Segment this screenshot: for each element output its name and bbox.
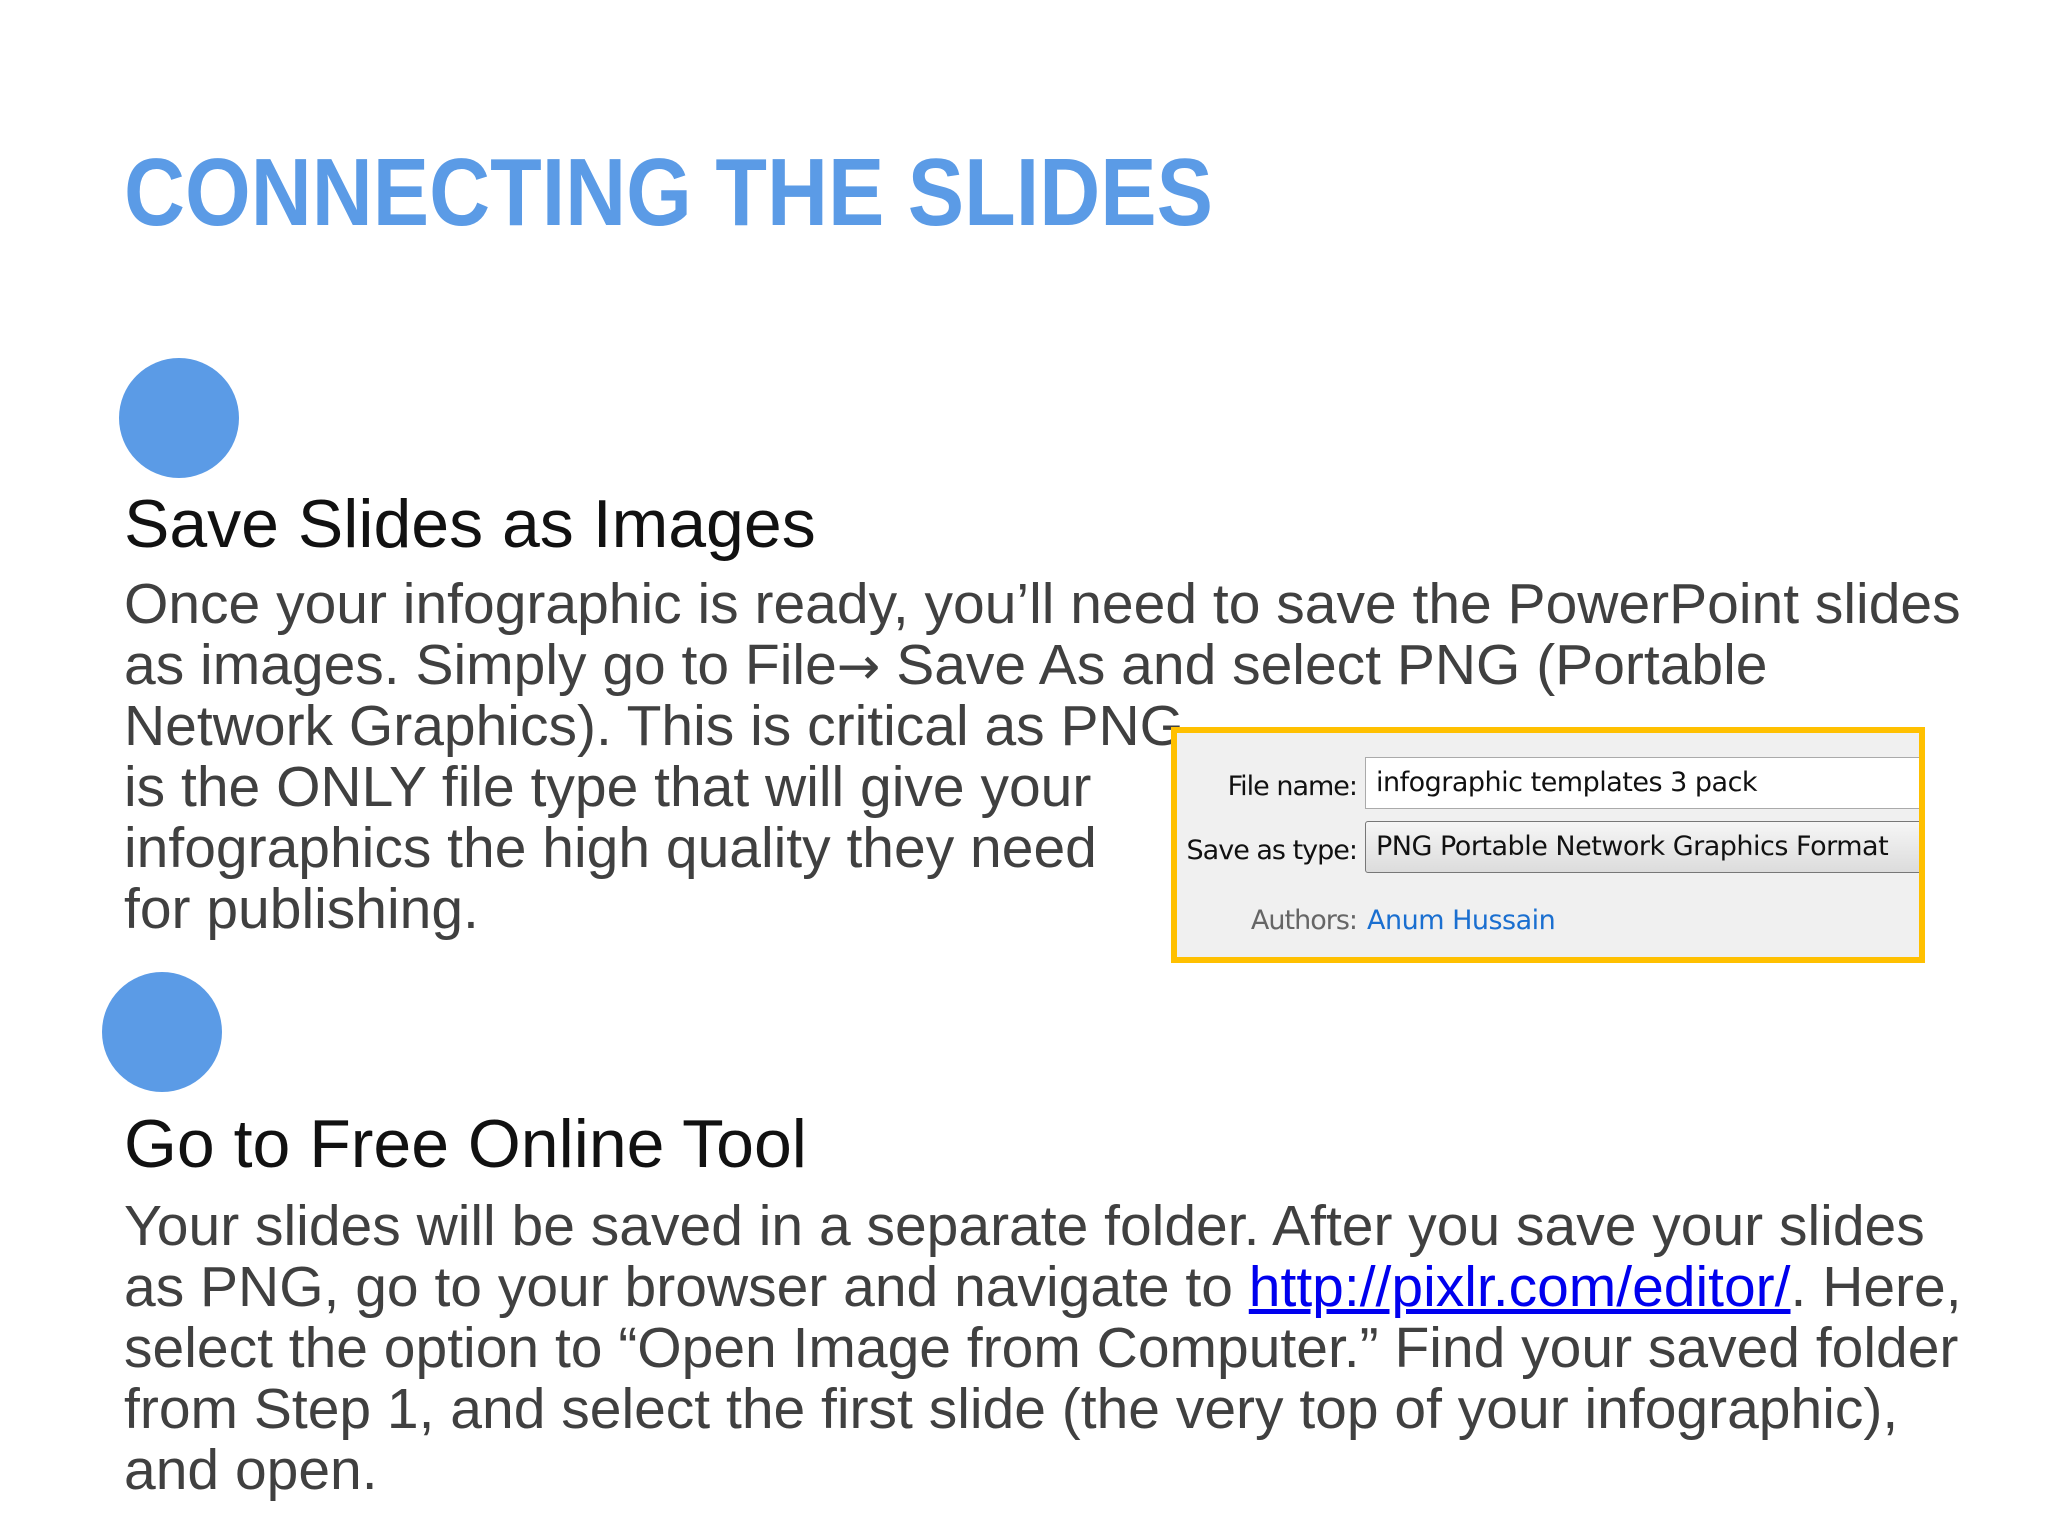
file name field xyxy=(1228,757,1919,809)
text block: step 2 body: select the option to “Open Image from Computer.” Find your saved folder xyxy=(124,1316,1958,1380)
heading: go to free online tool: Go to Free Online Tool xyxy=(124,1106,807,1182)
text block: step 2 body xyxy=(124,1194,1962,1502)
screenshot: save dialog: File name: xyxy=(1228,771,1357,802)
title: CONNECTING THE SLIDES xyxy=(124,139,1213,246)
text block: step 2 body: Your slides will be saved in a separate folder. After you save your slides xyxy=(124,1194,1925,1258)
screenshot: save dialog: Authors: xyxy=(1251,905,1357,936)
text block: step 1 body: Network Graphics). This is critical as PNG xyxy=(124,694,1184,758)
text block: step 2 body: as PNG, go to your browser and navigate to http://pixlr.com/editor/. Here, xyxy=(124,1255,1962,1319)
screenshot: save dialog: Save as type: xyxy=(1187,835,1357,866)
icon: step 1 circle xyxy=(119,358,239,478)
text block: step 2 body: from Step 1, and select the first slide (the very top of your infographic), xyxy=(124,1377,1898,1441)
screenshot: save dialog xyxy=(1171,727,1925,963)
heading: save slides as images: Save Slides as Images xyxy=(124,486,816,562)
text block: step 1 body: is the ONLY file type that will give your xyxy=(124,755,1091,819)
authors xyxy=(1251,905,1555,936)
screenshot: save dialog: Anum Hussain xyxy=(1367,905,1555,936)
text block: step 1 body: for publishing. xyxy=(124,877,479,941)
text block: step 1 body: Once your infographic is ready, you’ll need to save the PowerPoint slides xyxy=(124,572,1961,636)
save as type field xyxy=(1187,821,1919,873)
text block: step 2 body: and open. xyxy=(124,1438,378,1502)
text block: step 1 body: infographics the high quality they need xyxy=(124,816,1097,880)
screenshot: save dialog: infographic templates 3 pack xyxy=(1376,767,1757,798)
text block: step 1 body xyxy=(124,572,1961,941)
icon: step 2 circle xyxy=(102,972,222,1092)
screenshot: save dialog: PNG Portable Network Graphics Format xyxy=(1376,831,1888,862)
text block: step 1 body: as images. Simply go to File→ Save As and select PNG (Portable xyxy=(124,633,1767,697)
